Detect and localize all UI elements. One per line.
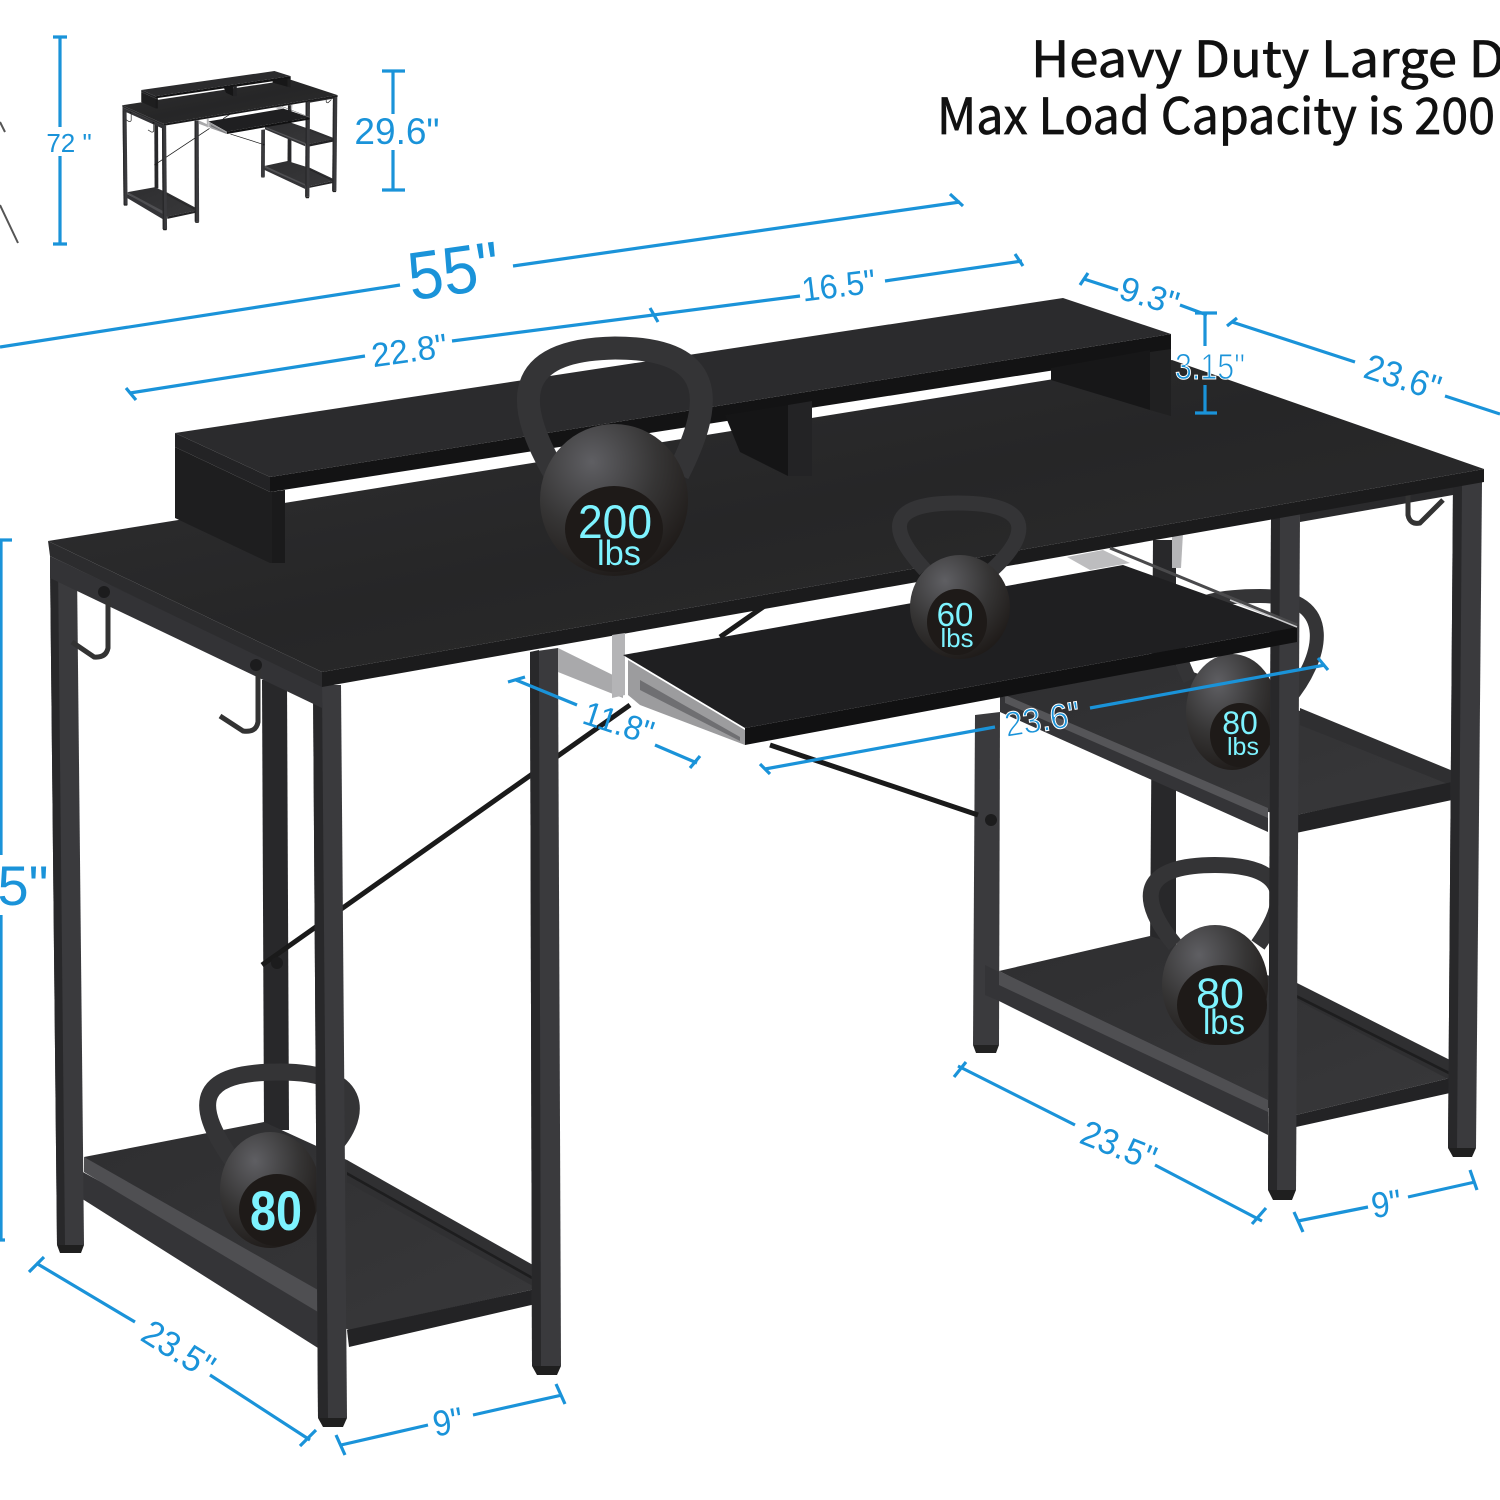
riser depth dimension 9.3 inches: 9.3" [1115,270,1183,323]
desk rear structure [70,533,1453,1348]
right shelf width dimension 9 inches: 9" [1369,1181,1404,1226]
right shelf depth dimension 23.5 inches: 23.5" [1075,1112,1163,1179]
kettlebell 80 lower right: lbs [1203,1003,1245,1042]
desk height dimension 29.6 inches [354,71,440,190]
desk height dimension 29.6 inches: 29.6" [354,111,440,152]
right apron bar [1300,486,1453,522]
tray depth dimension 11.8 inches [508,677,700,768]
riser width dimensions 22.8 and 16.5 inches: 22.8" [369,327,450,375]
monitor riser [175,298,1171,563]
left shelf width dimension 9 inches [336,1384,565,1455]
left shelf depth dimension 23.5 inches [29,1257,316,1446]
kettlebell 200: 200 [578,495,652,548]
person height dimension 72 inches: 72 " [46,128,92,158]
hooks [72,492,1443,731]
kettlebell 80 upper right shelf: 80 [1222,705,1258,741]
figure fragment at left edge [0,122,18,243]
left apron bar [50,556,322,708]
width dimension 55 inches: 55" [403,227,505,315]
riser height dimension 3.15 inches [1175,313,1245,413]
cross braces [262,605,978,965]
kettlebell 80 upper right shelf: lbs [1227,733,1259,761]
kettlebell 60: 60 [937,596,973,633]
right shelf depth dimension 23.5 inches [954,1062,1266,1224]
tray width dimension 23.6 inches: 23.6" [1002,694,1083,745]
desk depth dimension 23.6 inches [1227,318,1500,414]
right shelf width dimension 9 inches [1294,1170,1477,1232]
tray width dimension 23.6 inches [760,658,1328,774]
title: Heavy Duty Large D [1031,20,1500,92]
kettlebell 80 lower right: 80 [1196,970,1244,1018]
kettlebell 200 [528,348,701,576]
bolts [98,586,997,969]
kettlebell 80 upper right shelf [1177,596,1317,770]
title [937,20,1500,149]
front legs [50,482,1482,1427]
thumbnail desk [122,71,338,230]
desk front structure [48,298,1484,1427]
kettlebell 80 lower right [1151,865,1278,1045]
keyboard slide rails [558,550,1130,698]
width dimension 55 inches [0,194,963,347]
left shelf width dimension 9 inches: 9" [429,1399,466,1444]
kettlebell 200: lbs [597,534,641,573]
right upper shelf [1000,660,1453,833]
riser height dimension 3.15 inches: 3.15" [1175,346,1245,387]
tray depth dimension 11.8 inches: 11.8" [578,694,659,753]
kettlebell 60: lbs [940,623,974,653]
kettlebell 80 lower left: 80 [250,1179,302,1242]
riser width dimensions 22.8 and 16.5 inches [126,254,1023,400]
left shelf depth dimension 23.5 inches: 23.5" [135,1311,223,1387]
riser width dimensions 22.8 and 16.5 inches: 16.5" [800,263,878,309]
kettlebell 80 lower left [208,1072,351,1248]
kettlebell 60 [899,503,1019,659]
person height dimension 72 inches [46,37,92,244]
left lower shelf [70,1122,540,1348]
riser depth dimension 9.3 inches [1080,270,1207,323]
desktop [48,360,1484,687]
slide bracket [612,633,625,698]
overall height dimension [0,540,55,1240]
keyboard tray [623,548,1297,745]
right lower shelf [985,936,1450,1135]
desk depth dimension 23.6 inches: 23.6" [1359,346,1446,409]
title: Max Load Capacity is 200 [937,77,1495,149]
